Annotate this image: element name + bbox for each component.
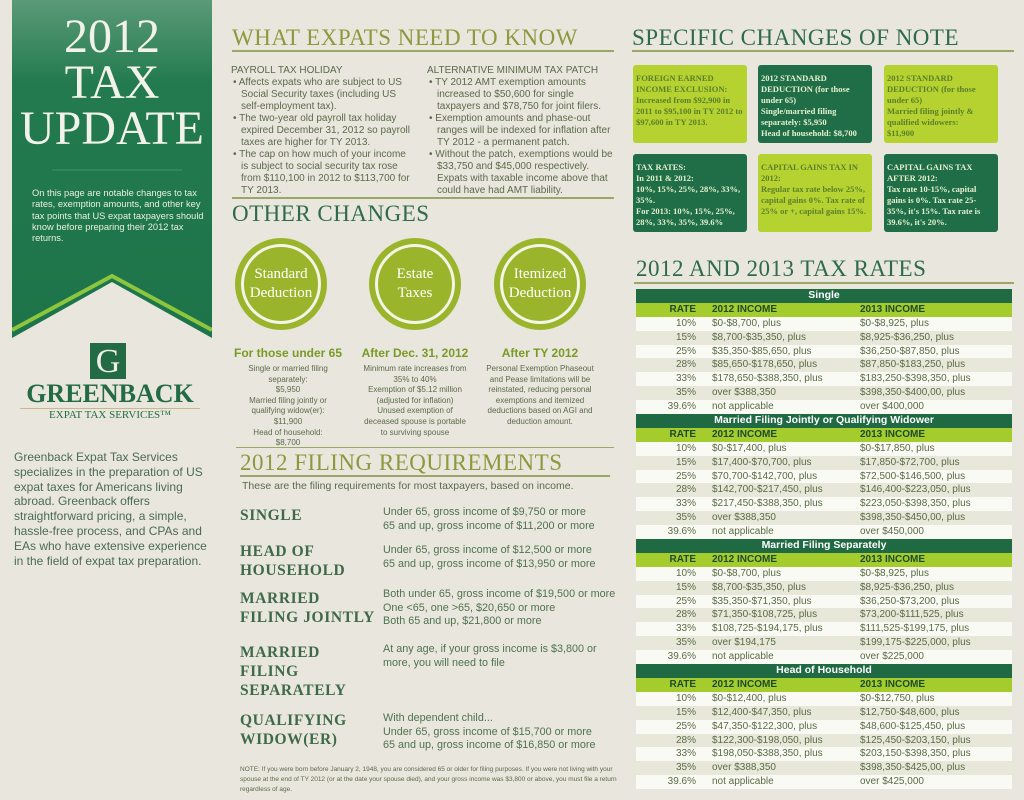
tax rates table: $0-$8,700, plus — [712, 568, 781, 579]
caption: estate taxes: Exemption of $5.12 million (adjusted for inflation) — [368, 385, 462, 405]
box: standard deduction married: Married filing jointly & qualified widowers: — [887, 106, 974, 127]
text block: payroll tax holiday: The two-year old payroll tax holiday expired December 31, 2012 so payroll taxes are higher for TY 2013. — [239, 113, 410, 148]
circle: itemized deduction: Deduction — [509, 285, 571, 301]
text block: alternative minimum tax patch: Exemption amounts and phase-out ranges will be indexed for inflation after TY 2012 - a permanent patch. — [435, 113, 610, 148]
tax rates table: 28% — [676, 609, 696, 620]
tax rates table: $0-$8,700, plus — [712, 318, 781, 329]
tax rates table: 25% — [676, 721, 696, 732]
tax rates table: 2013 INCOME — [860, 429, 925, 440]
tax rates table: $47,350-$122,300, plus — [712, 721, 817, 732]
text: 65 and up, gross income of $13,950 or more — [383, 558, 595, 570]
caption: standard deduction: Married filing jointly or qualifying widow(er): — [249, 396, 327, 415]
tax rates table: $183,250-$398,350, plus — [860, 373, 971, 384]
filing: head of household: HOUSEHOLD — [240, 562, 345, 579]
circle: standard deduction — [235, 238, 327, 330]
tax rates table: $198,050-$388,350, plus — [712, 748, 823, 759]
text: more, you will need to file — [383, 656, 505, 668]
tax rates table: $199,175-$225,000, plus — [860, 637, 971, 648]
tax rates table: not applicable — [712, 526, 774, 537]
tax rates table: $398,350-$400,00, plus — [860, 387, 965, 398]
tax rates table: $12,750-$48,600, plus — [860, 707, 960, 718]
tax rates table: $35,350-$71,350, plus — [712, 596, 812, 607]
tax rates table: $12,400-$47,350, plus — [712, 707, 812, 718]
tax rates table: 10% — [676, 318, 696, 329]
text block: payroll tax holiday: PAYROLL TAX HOLIDAY — [231, 65, 343, 76]
tax rates table: $217,450-$388,350, plus — [712, 498, 823, 509]
tax rates table: 2012 INCOME — [712, 554, 777, 565]
tax rates table: 25% — [676, 596, 696, 607]
tax rates table: 2012 INCOME — [712, 679, 777, 690]
note: NOTE: If you were born before January 2, 1948, you are considered 65 or older for filing purposes. If you were not living with your spouse at the end of TY 2012 (or at the date your spouse died), and your gross income was $3,800 or above, you must file a return regardless of age. — [240, 766, 617, 793]
circle: standard deduction: Standard — [254, 266, 308, 282]
icon: G square — [90, 343, 126, 379]
tax rates table: RATE — [670, 429, 696, 440]
tax rates table: $0-$8,925, plus — [860, 318, 929, 329]
tax rates table: 2012 INCOME — [712, 304, 777, 315]
tax rates table: 35% — [676, 762, 696, 773]
tax rates table: 2013 INCOME — [860, 679, 925, 690]
filing: married filing separately: FILING — [240, 663, 299, 680]
caption: standard deduction: $5,950 — [276, 385, 300, 394]
tax rates table: Married Filing Jointly or Qualifying Widower — [714, 414, 934, 426]
tax rates table: $70,700-$142,700, plus — [712, 471, 817, 482]
text: 65 and up, gross income of $16,850 or more — [383, 739, 595, 751]
intro text: On this page are notable changes to tax rates, exemption amounts, and other key tax points that US expat taxpayers should know before preparing their 2012 tax returns. — [32, 188, 204, 243]
heading: 2012 and 2013 tax rates: 2012 AND 2013 TAX RATES — [636, 256, 926, 281]
tax rates table: not applicable — [712, 776, 774, 787]
tax rates table: 28% — [676, 359, 696, 370]
filing: married filing jointly — [240, 590, 375, 626]
tax rates table: over $450,000 — [860, 526, 924, 537]
tax rates table: RATE — [670, 679, 696, 690]
tax rates table: 39.6% — [668, 776, 696, 787]
box: capital gains after 2012: CAPITAL GAINS TAX AFTER 2012: — [887, 162, 972, 183]
filing: head of household: HEAD OF — [240, 543, 314, 560]
tax rates table: $125,450-$203,150, plus — [860, 734, 971, 746]
tax rates table: $8,700-$35,350, plus — [712, 582, 806, 593]
tax rates table: 33% — [676, 498, 696, 509]
box: tax rates: In 2011 & 2012: — [636, 173, 694, 183]
filing: married filing jointly: MARRIED — [240, 590, 320, 607]
circle: estate taxes: Taxes — [398, 285, 432, 301]
tax rates table: $8,700-$35,350, plus — [712, 332, 806, 343]
caption: estate taxes: Unused exemption of deceased spouse is portable to surviving spouse — [364, 406, 466, 437]
caption: itemized deduction: After TY 2012 — [502, 346, 578, 360]
tax rates table: 25% — [676, 471, 696, 482]
text: At any age, if your gross income is $3,800 or — [383, 643, 597, 655]
filing: qualifying widower — [240, 712, 347, 748]
tax rates table: over $388,350 — [712, 387, 776, 398]
text: Both under 65, gross income of $19,500 or more — [383, 588, 615, 600]
tax rates table: Married Filing Separately — [762, 539, 886, 551]
filing: married filing separately — [240, 644, 346, 699]
tax rates table: over $194,175 — [712, 637, 776, 648]
tax rates table: over $388,350 — [712, 762, 776, 773]
tax rates table: $142,700-$217,450, plus — [712, 484, 823, 495]
title: TAX — [65, 56, 159, 109]
tax rates table: 33% — [676, 623, 696, 634]
heading: specific changes of note: SPECIFIC CHANGES OF NOTE — [632, 25, 959, 50]
filing: single: SINGLE — [240, 507, 302, 524]
box: standard deduction single — [758, 65, 872, 143]
tax rates table: $223,050-$398,350, plus — [860, 498, 971, 509]
tax rates table: $146,400-$223,050, plus — [860, 484, 971, 495]
text block: payroll tax holiday: The cap on how much of your income is subject to social security tax rose from $110,100 in 2012 to $113,700 for TY 2013. — [239, 149, 410, 196]
tax rates table: 39.6% — [668, 526, 696, 537]
circle: estate taxes: Estate — [397, 266, 433, 282]
tax rates table: $0-$8,925, plus — [860, 568, 929, 579]
tax rates table: $17,850-$72,700, plus — [860, 457, 960, 468]
tax rates table: 2013 INCOME — [860, 554, 925, 565]
box: tax rates: TAX RATES: — [636, 162, 686, 172]
circle: estate taxes — [369, 238, 461, 330]
tax rates table: over $225,000 — [860, 651, 924, 662]
tax rates table: over $400,000 — [860, 401, 924, 412]
tax rates table: 15% — [676, 457, 696, 468]
box: capital gains after 2012: Tax rate 10-15%, capital gains is 0%. Tax rate 25-35%, it's 15%. Tax rate is 39.6%, it's 20%. — [887, 184, 980, 227]
circle: standard deduction: Deduction — [250, 285, 312, 301]
caption: estate taxes — [362, 346, 468, 437]
tax rates table: $48,600-$125,450, plus — [860, 721, 965, 732]
box: capital gains after 2012 — [884, 154, 998, 232]
text: Both 65 and up, $21,800 or more — [383, 615, 541, 627]
tax rates table: 15% — [676, 332, 696, 343]
heading: 2012 filing requirements: 2012 FILING REQUIREMENTS — [240, 450, 562, 475]
tax rates table: 10% — [676, 443, 696, 454]
logo: greenback: GREENBACK — [26, 379, 194, 408]
tax rates table: RATE — [670, 554, 696, 565]
filing: married filing separately: MARRIED — [240, 644, 320, 661]
caption: standard deduction — [234, 346, 342, 447]
tax rates table: $111,525-$199,175, plus — [860, 623, 969, 634]
tax rates table: 33% — [676, 373, 696, 384]
caption: standard deduction: Head of household: — [253, 428, 323, 437]
tax rates table: 39.6% — [668, 401, 696, 412]
tax rates table: $73,200-$111,525, plus — [860, 609, 964, 620]
box: standard deduction married: 2012 STANDARD DEDUCTION (for those under 65) — [887, 73, 976, 105]
box: foreign earned income exclusion — [633, 65, 747, 143]
tax rates table: $0-$12,750, plus — [860, 693, 935, 704]
tax rates table: $36,250-$87,850, plus — [860, 346, 960, 357]
caption: standard deduction: For those under 65 — [234, 346, 342, 360]
filing: head of household — [240, 543, 345, 579]
tax rates table: $71,350-$108,725, plus — [712, 609, 817, 620]
tax rates table: Single — [808, 289, 840, 301]
caption: itemized deduction: Personal Exemption Phaseout and Pease limitations will be reinstated, reducing personal exemptions and itemized deductions based on AGI and deduction amount. — [486, 364, 594, 426]
tax rates table: $85,650-$178,650, plus — [712, 359, 817, 370]
tax rates table: 15% — [676, 707, 696, 718]
banner: 2012 tax update — [12, 0, 212, 338]
logo: greenback — [20, 343, 200, 421]
filing: qualifying widower: WIDOW(ER) — [240, 731, 338, 748]
tax rates table: 35% — [676, 387, 696, 398]
box: standard deduction single: Head of household: $8,700 — [761, 128, 857, 138]
about text: Greenback Expat Tax Services specializes in the preparation of US expat taxes for Americans living abroad. Greenback offers straightforward pricing, a simple, hassle-free process, and CPAs and EAs who have extensive experience in the field of expat tax preparation. — [14, 450, 207, 568]
tax rates table: $122,300-$198,050, plus — [712, 734, 823, 746]
filing: married filing jointly: FILING JOINTLY — [240, 609, 375, 626]
tax rates table: $8,925-$36,250, plus — [860, 332, 954, 343]
box: foreign earned income exclusion: Increased from $92,900 in 2011 to $95,100 in TY 2012 to $97,600 in TY 2013. — [636, 95, 742, 127]
tax rates table: $72,500-$146,500, plus — [860, 471, 965, 482]
circle: itemized deduction — [494, 238, 586, 330]
tax rates table: $108,725-$194,175, plus — [712, 623, 823, 634]
tax rates table: over $388,350 — [712, 512, 776, 523]
heading: what expats need to know: WHAT EXPATS NEED TO KNOW — [232, 25, 578, 50]
text: One <65, one >65, $20,650 or more — [383, 602, 555, 614]
box: standard deduction single: 2012 STANDARD DEDUCTION (for those under 65) — [761, 73, 850, 105]
logo: greenback: EXPAT TAX SERVICES™ — [49, 409, 171, 421]
text block: alternative minimum tax patch — [427, 65, 613, 196]
tax rates table: 39.6% — [668, 651, 696, 662]
text: Under 65, gross income of $9,750 or more — [383, 506, 586, 518]
title — [20, 10, 204, 155]
heading: other changes: OTHER CHANGES — [232, 201, 430, 226]
tax rates table: RATE — [670, 304, 696, 315]
text block: alternative minimum tax patch: TY 2012 AMT exemption amounts increased to $50,600 for single taxpayers and $78,750 for joint filers. — [435, 77, 601, 112]
filing: qualifying widower: QUALIFYING — [240, 712, 347, 729]
tax rates table: 28% — [676, 734, 696, 746]
tax rates table: $17,400-$70,700, plus — [712, 457, 812, 468]
caption: estate taxes: Minimum rate increases from 35% to 40% — [363, 364, 467, 384]
filing intro: These are the filing requirements for most taxpayers, based on income. — [242, 480, 574, 492]
box: capital gains 2012: Regular tax rate below 25%, capital gains 0%. Tax rate of 25% or +, capital gains 15%. — [761, 184, 866, 216]
text: With dependent child... — [383, 712, 493, 724]
circle: itemized deduction: Itemized — [514, 266, 566, 282]
tax rates table: $87,850-$183,250, plus — [860, 359, 965, 370]
box: tax rates: For 2013: 10%, 15%, 25%, 28%, 33%, 35%, 39.6% — [636, 206, 735, 227]
tax rates table: 28% — [676, 484, 696, 495]
tax rates table: 33% — [676, 748, 696, 759]
caption: standard deduction: Single or married filing separately: — [248, 364, 328, 384]
tax rates table: not applicable — [712, 651, 774, 662]
box: foreign earned income exclusion: FOREIGN EARNED INCOME EXCLUSION: — [636, 73, 727, 94]
tax rates table: 2012 INCOME — [712, 429, 777, 440]
icon: G square: G — [96, 343, 120, 380]
tax rates table: $0-$12,400, plus — [712, 693, 787, 704]
box: tax rates: 10%, 15%, 25%, 28%, 33%, 35%. — [636, 184, 740, 205]
text block: alternative minimum tax patch: Without the patch, exemptions would be $33,750 and $45,000 respectively. Expats with taxable income above that could have had AMT liability. — [435, 149, 613, 196]
title: UPDATE — [20, 102, 204, 155]
caption: standard deduction: $11,900 — [274, 417, 302, 426]
tax rates table: $178,650-$388,350, plus — [712, 373, 823, 384]
tax rates table: 2013 INCOME — [860, 304, 925, 315]
caption: standard deduction: $8,700 — [276, 438, 300, 447]
tax rates table: 15% — [676, 582, 696, 593]
tax rates table: $36,250-$73,200, plus — [860, 596, 960, 607]
text block: payroll tax holiday: Affects expats who are subject to US Social Security taxes (including US self-employment tax). — [239, 77, 402, 112]
box: capital gains 2012 — [758, 154, 872, 232]
text: Under 65, gross income of $15,700 or more — [383, 726, 592, 738]
box: tax rates — [633, 154, 747, 232]
tax rates table: $35,350-$85,650, plus — [712, 346, 812, 357]
tax rates table: $203,150-$398,350, plus — [860, 748, 971, 759]
tax rates table: $398,350-$425,00, plus — [860, 762, 965, 773]
tax rates table: $8,925-$36,250, plus — [860, 582, 954, 593]
box: standard deduction married — [884, 65, 998, 143]
tax rates table: 10% — [676, 568, 696, 579]
tax rates table: $0-$17,400, plus — [712, 443, 787, 454]
caption: estate taxes: After Dec. 31, 2012 — [362, 346, 468, 360]
box: standard deduction married: $11,900 — [887, 128, 914, 138]
box: standard deduction single: Single/married filing separately: $5,950 — [761, 106, 836, 127]
tax rates table: $0-$17,850, plus — [860, 443, 935, 454]
box: capital gains 2012: CAPITAL GAINS TAX IN 2012: — [761, 162, 858, 183]
tax rates table: 35% — [676, 637, 696, 648]
text block: payroll tax holiday — [231, 65, 410, 196]
text: Under 65, gross income of $12,500 or more — [383, 544, 592, 556]
filing: married filing separately: SEPARATELY — [240, 682, 346, 699]
tax rates table: Head of Household — [776, 664, 872, 676]
text: 65 and up, gross income of $11,200 or more — [383, 520, 595, 532]
text block: alternative minimum tax patch: ALTERNATIVE MINIMUM TAX PATCH — [427, 65, 598, 76]
tax rates table: not applicable — [712, 401, 774, 412]
title: 2012 — [64, 10, 160, 63]
tax rates table — [636, 289, 1012, 789]
tax rates table: $398,350-$450,00, plus — [860, 512, 965, 523]
tax rates table: 25% — [676, 346, 696, 357]
tax rates table: 35% — [676, 512, 696, 523]
tax rates table: over $425,000 — [860, 776, 924, 787]
tax rates table: 10% — [676, 693, 696, 704]
